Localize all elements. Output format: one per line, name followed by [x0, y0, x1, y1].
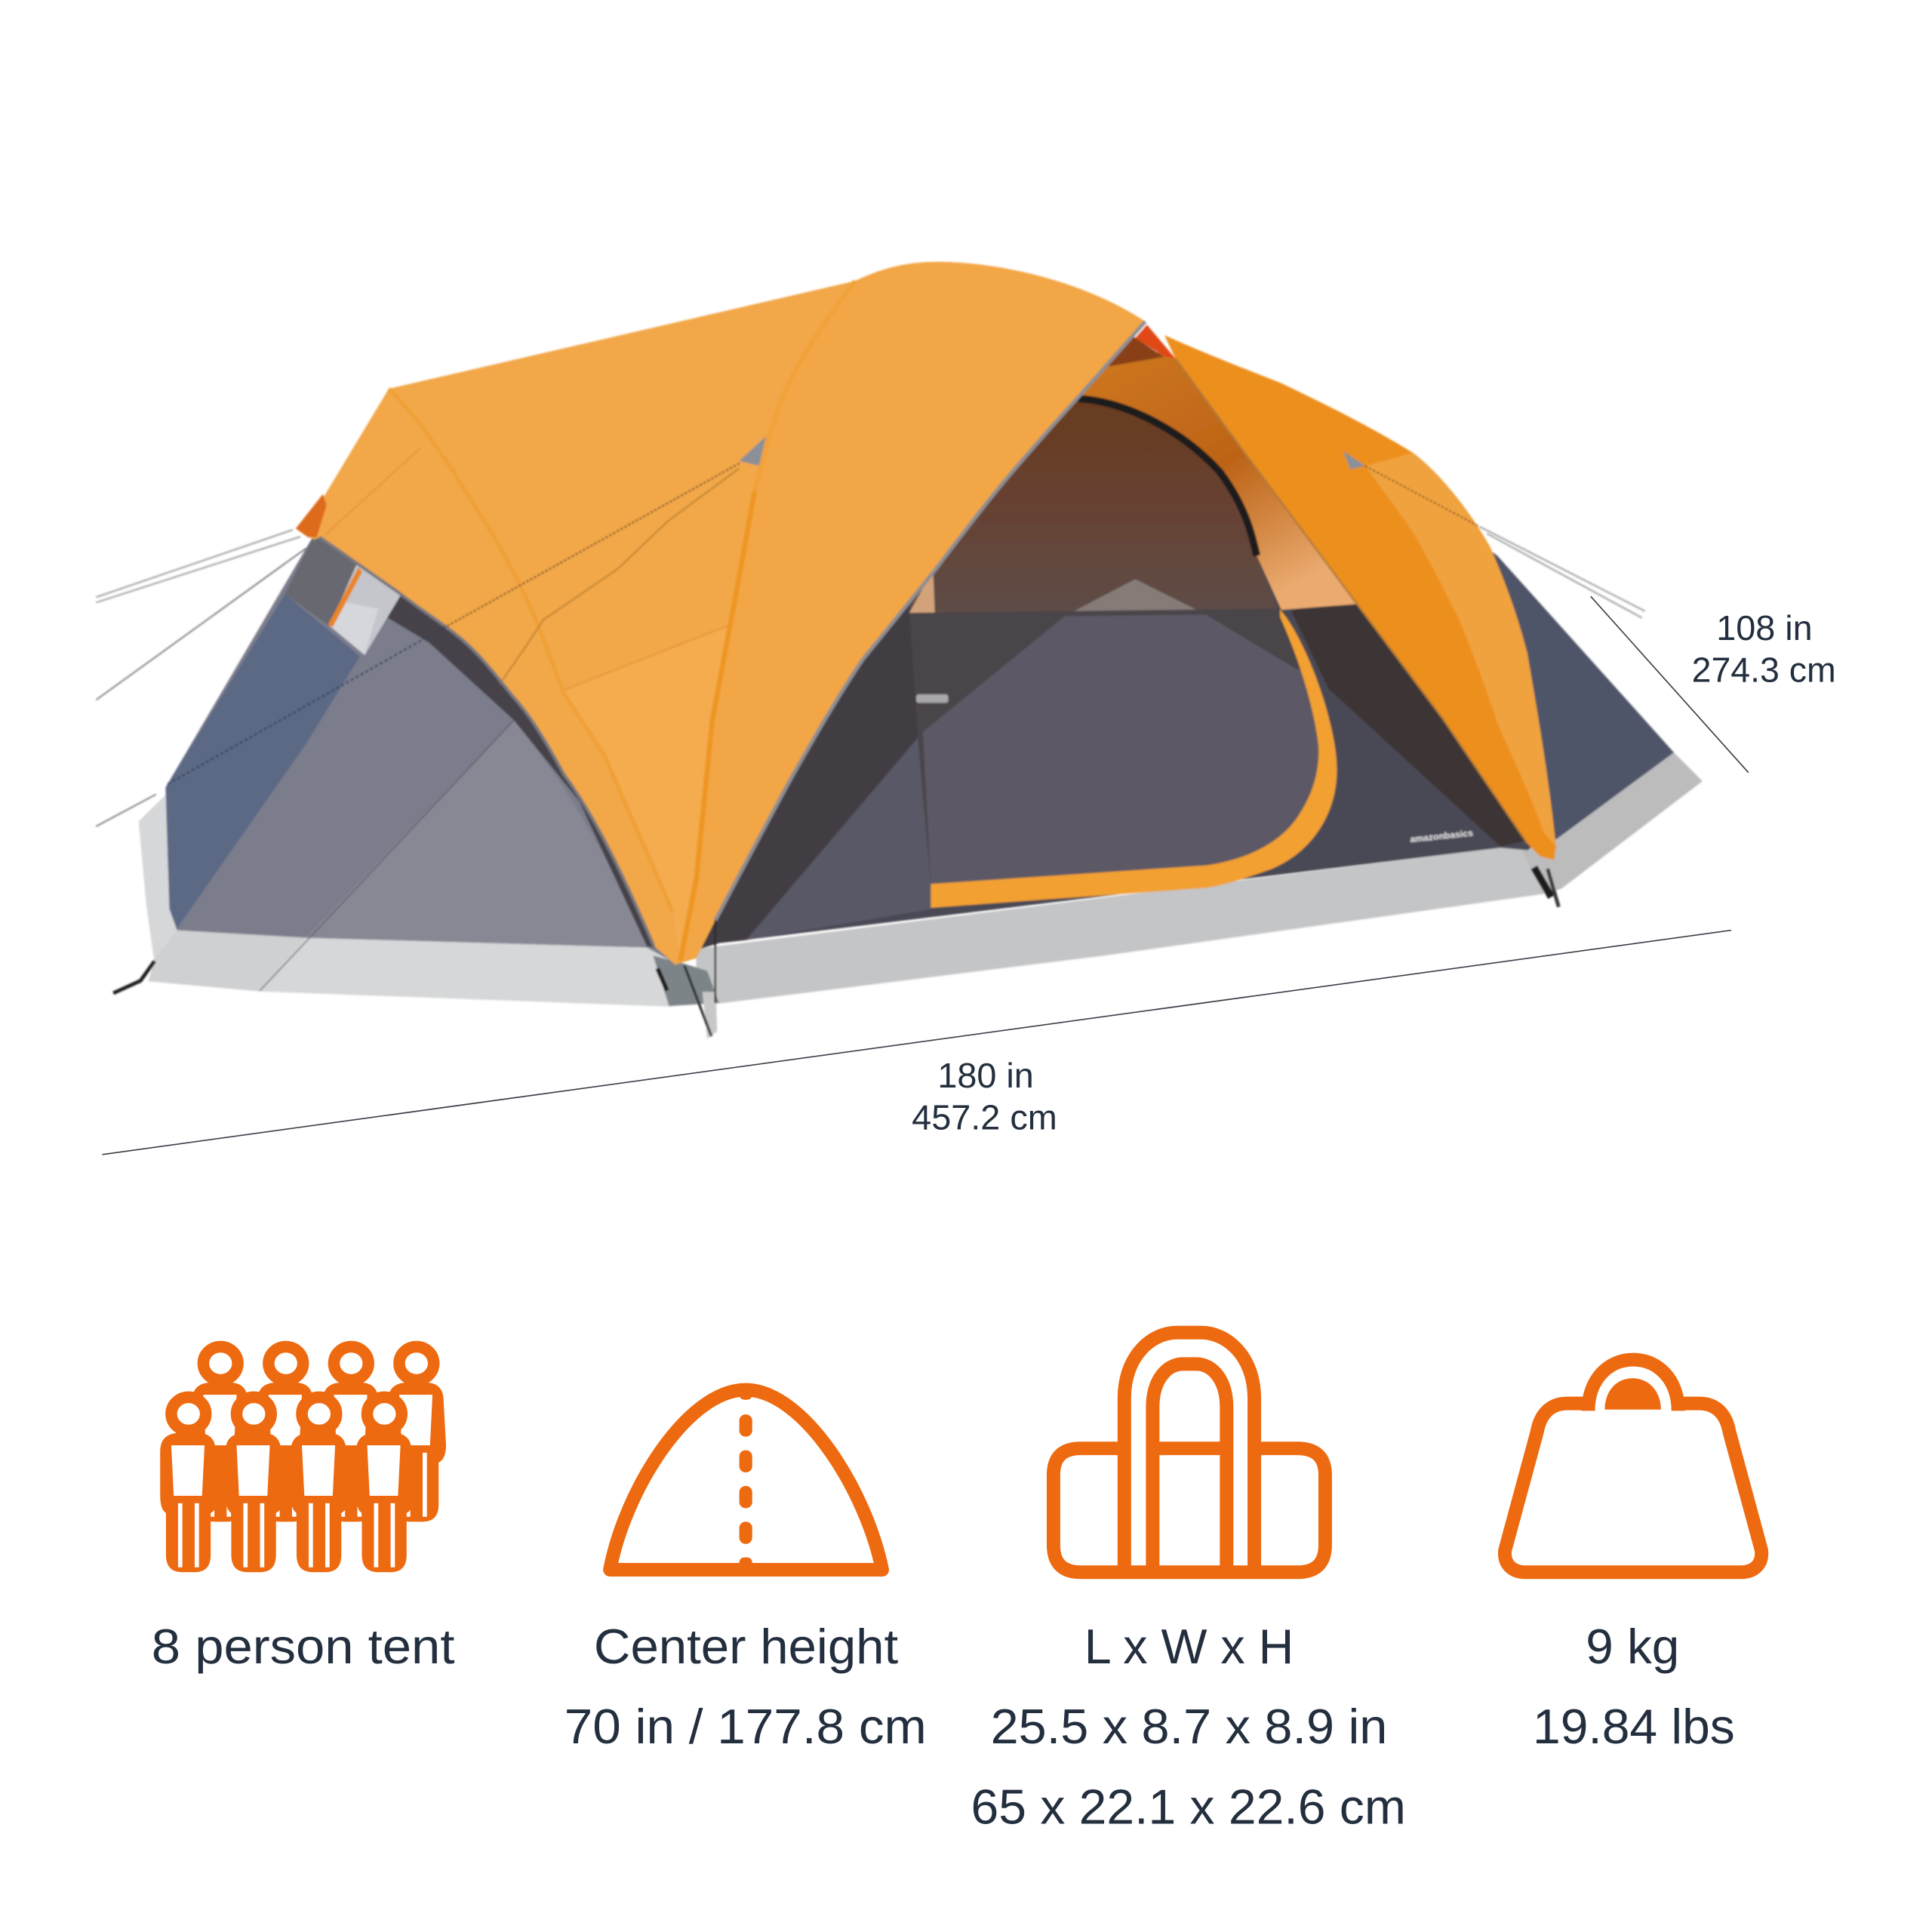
inner fly underside	[1078, 325, 1361, 610]
main fly	[296, 262, 1146, 964]
dimension label: length: 180 in	[937, 1056, 1034, 1095]
right end wall	[1478, 542, 1674, 851]
dimension line: length	[103, 931, 1731, 1155]
label: packed size: L x W x H	[1084, 1619, 1294, 1674]
dimension label: width	[1692, 608, 1836, 690]
label: packed size	[971, 1619, 1406, 1834]
right flap	[1164, 335, 1556, 860]
side window	[328, 557, 407, 655]
dimension label: length	[912, 1056, 1057, 1137]
label: capacity: 8 person tent	[152, 1619, 454, 1674]
door mesh	[909, 376, 1279, 616]
front wall	[693, 376, 1540, 951]
label: packed size: 25.5 x 8.7 x 8.9 in	[991, 1699, 1387, 1754]
stakes	[113, 867, 1558, 1038]
left wall	[165, 532, 672, 991]
dimension label: length: 457.2 cm	[912, 1097, 1057, 1137]
tent logo: amazonbasics	[1410, 827, 1474, 844]
label: center height: 70 in / 177.8 cm	[565, 1699, 927, 1754]
label: center height	[565, 1619, 927, 1754]
groundsheet	[139, 752, 1703, 1007]
icon: tent height	[610, 1390, 882, 1570]
icon: carry bag	[1054, 1333, 1325, 1572]
dimension label: width: 108 in	[1716, 608, 1813, 648]
dotted tie line	[168, 626, 447, 784]
icon: weight	[1505, 1360, 1761, 1572]
dimension line: width	[1591, 596, 1749, 773]
label: weight	[1533, 1619, 1735, 1754]
tent photo	[96, 262, 1703, 1038]
guy lines	[96, 527, 1645, 826]
door panel	[909, 609, 1321, 884]
label: weight: 9 kg	[1586, 1619, 1679, 1674]
dimension label: width: 274.3 cm	[1692, 651, 1836, 690]
label: packed size: 65 x 22.1 x 22.6 cm	[971, 1779, 1406, 1834]
label: center height: Center height	[594, 1619, 898, 1674]
door zip band	[931, 609, 1337, 908]
label: weight: 19.84 lbs	[1533, 1699, 1735, 1754]
icon: eight people	[160, 1346, 446, 1572]
